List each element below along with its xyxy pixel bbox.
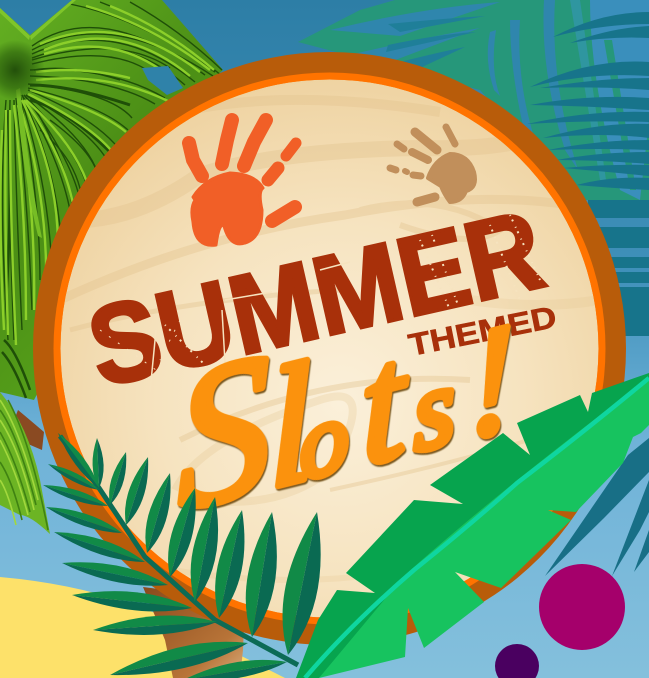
- dark teal fronds right: [527, 12, 649, 336]
- palm trunk stub left: [14, 410, 44, 450]
- palm lower frond left: [0, 392, 50, 534]
- palm trunk: [143, 587, 245, 678]
- magenta dot: [539, 564, 625, 650]
- heading: Slots!: S: [172, 309, 275, 554]
- beach sand: [0, 577, 285, 678]
- dark teal fronds lower right: [545, 438, 649, 576]
- teal palm frond top right: [298, 0, 649, 200]
- tan handprint: [390, 127, 475, 202]
- palm crown fronds left: [0, 0, 223, 400]
- wooden sign face: [60, 80, 600, 618]
- heading: SUMMER: SUMMER: [78, 187, 554, 410]
- heading: Slots!: o: [298, 377, 350, 502]
- purple dot: [495, 644, 539, 678]
- heading: Slots!: !: [464, 290, 518, 471]
- heading: THEMED: THEMED: [406, 299, 559, 363]
- heading: Slots!: l: [265, 327, 316, 525]
- fern branch: [42, 430, 333, 678]
- heading: Slots!: s: [411, 342, 457, 477]
- wooden sign orange ring: [54, 72, 606, 624]
- banana leaf: [296, 373, 649, 678]
- heading: Slots!: t: [358, 307, 411, 500]
- wooden sign outer ring: [33, 52, 626, 645]
- orange handprint: [189, 120, 296, 245]
